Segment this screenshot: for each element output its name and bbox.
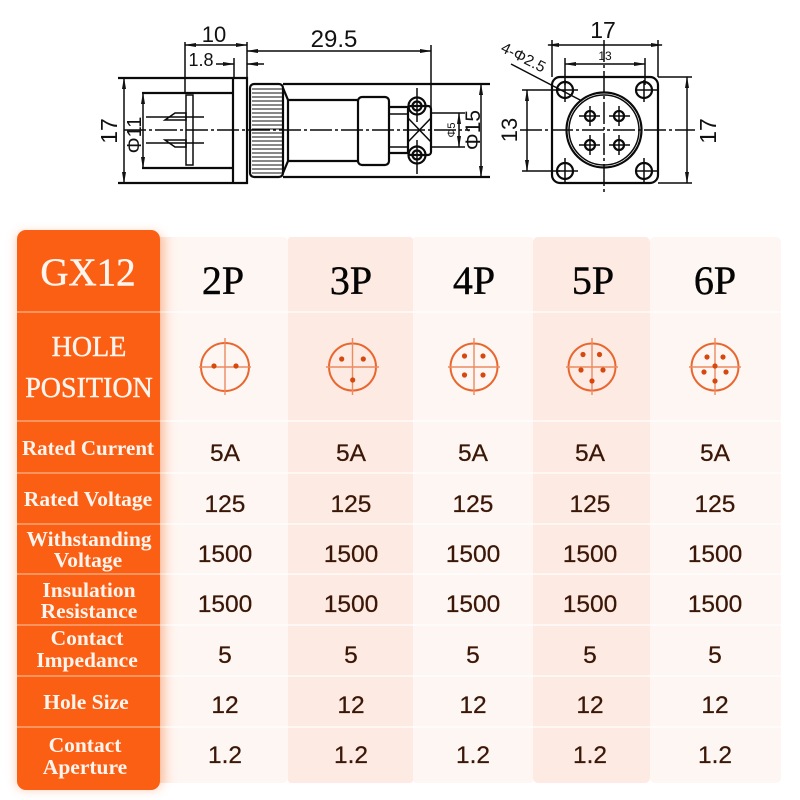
- dimension 29.5: 29.5: [311, 26, 357, 53]
- dimension 10: 10: [202, 22, 226, 47]
- cable clamp with screws: [408, 88, 431, 174]
- values: 4P column: 1500: [446, 591, 500, 618]
- values: 3P column: [324, 440, 378, 769]
- dimension phi 5: Φ5: [446, 123, 458, 137]
- values: 6P column: 1.2: [698, 742, 732, 769]
- values: 2P column: 5: [218, 642, 232, 669]
- sidebar shadow: [16, 232, 162, 790]
- column headings: 3P: [330, 258, 372, 303]
- dimension 17 top: 17: [590, 17, 616, 43]
- specification table: [16, 230, 781, 790]
- column headings: 6P: [694, 258, 736, 303]
- values: 3P column: 12: [337, 692, 365, 719]
- values: 3P column: 5: [344, 642, 358, 669]
- values: 3P column: 1500: [324, 591, 378, 618]
- dimension 17 top: [548, 17, 662, 77]
- values: 5P column: 5: [583, 642, 597, 669]
- values: 6P column: 1500: [688, 591, 742, 618]
- row labels: Insulation: [42, 578, 136, 602]
- row labels: Contact: [51, 626, 124, 650]
- dimension 17 height: [96, 78, 124, 183]
- label hole position: HOLE: [52, 332, 126, 363]
- side view technical drawing: [96, 22, 490, 183]
- dimension 17 height: 17: [96, 118, 122, 144]
- row labels: Contact: [49, 733, 122, 757]
- values: 4P column: 1500: [446, 541, 500, 568]
- central socket: [566, 92, 642, 168]
- icon: 2P hole position: [199, 338, 251, 395]
- column headings: [202, 258, 736, 303]
- dimension 17 right: [658, 77, 721, 183]
- values: 3P column: 5A: [336, 440, 367, 467]
- column headings: 2P: [202, 258, 244, 303]
- values: 4P column: 1.2: [456, 742, 490, 769]
- values: 4P column: 125: [453, 491, 493, 518]
- values: 6P column: 12: [701, 692, 729, 719]
- values: 3P column: 125: [331, 491, 371, 518]
- dimension 13 left: 13: [497, 118, 522, 142]
- dimension phi 15: [462, 84, 485, 177]
- row labels: Resistance: [41, 599, 137, 623]
- dimension phi 11: Φ11: [124, 117, 146, 153]
- row labels: Rated Current: [22, 436, 154, 460]
- dimension 10: [185, 22, 247, 93]
- values: 2P column: 5A: [210, 440, 241, 467]
- values: 2P column: [198, 440, 252, 769]
- column headings: 4P: [453, 258, 495, 303]
- column headings: 5P: [572, 258, 614, 303]
- values: 2P column: 1500: [198, 541, 252, 568]
- row labels: Hole Size: [43, 690, 129, 714]
- values: 6P column: 5: [708, 642, 722, 669]
- orange label sidebar: [17, 230, 160, 790]
- dimension phi 15: Φ15: [462, 110, 485, 150]
- centre lines: [520, 40, 695, 192]
- dimension phi 5: [431, 113, 465, 147]
- values: 2P column: 1500: [198, 591, 252, 618]
- values: 4P column: 5A: [458, 440, 489, 467]
- hole callout 4-phi 2.5: [498, 40, 582, 101]
- dimension 1.8: [188, 50, 264, 78]
- dimension 13 top: 13: [598, 49, 612, 63]
- values: 6P column: 1500: [688, 541, 742, 568]
- values: 6P column: 5A: [700, 440, 731, 467]
- sidebar title GX12: GX12: [40, 251, 136, 294]
- values: 6P column: 125: [695, 491, 735, 518]
- row separators: [17, 312, 781, 727]
- values: 5P column: [563, 440, 617, 769]
- dimension phi 11: [124, 93, 146, 168]
- dimension 13 top: [565, 49, 645, 85]
- values: 2P column: 12: [211, 692, 239, 719]
- front view technical drawing: [497, 17, 721, 192]
- values: 5P column: 1500: [563, 591, 617, 618]
- column backgrounds: [160, 237, 781, 783]
- knurled connector nut: [250, 84, 283, 177]
- flange and rear body: [118, 78, 247, 183]
- values: 5P column: 1500: [563, 541, 617, 568]
- row labels: Aperture: [43, 755, 127, 779]
- row labels: Rated Voltage: [24, 487, 152, 511]
- dimension 13 left: [497, 90, 560, 171]
- centre line: [124, 129, 470, 131]
- row labels: Withstanding: [26, 527, 152, 551]
- hole callout 4-phi 2.5: 4-Φ2.5: [498, 40, 548, 76]
- row labels: [22, 436, 154, 779]
- icon: 6P hole position: [689, 338, 741, 395]
- values: 6P column: [688, 440, 742, 769]
- dimension 17 right: 17: [695, 118, 721, 144]
- values: 4P column: 12: [459, 692, 487, 719]
- values: 5P column: 1.2: [573, 742, 607, 769]
- values: 4P column: 5: [466, 642, 480, 669]
- values: 4P column: [446, 440, 500, 769]
- row labels: Impedance: [36, 648, 138, 672]
- connector barrel and collar: [283, 84, 490, 177]
- label hole position: POSITION: [25, 373, 153, 404]
- values: 3P column: 1.2: [334, 742, 368, 769]
- icon: 5P hole position: [566, 338, 618, 395]
- square flange: [552, 77, 658, 183]
- values: 5P column: 125: [570, 491, 610, 518]
- label hole position: [25, 332, 153, 404]
- icon: 3P hole position: [326, 338, 379, 395]
- values: 2P column: 125: [205, 491, 245, 518]
- mounting holes: [556, 80, 657, 182]
- icon: 4P hole position: [448, 338, 500, 395]
- values: 5P column: 12: [576, 692, 604, 719]
- values: 5P column: 5A: [575, 440, 606, 467]
- dimension 1.8: 1.8: [188, 50, 214, 70]
- values: 2P column: 1.2: [208, 742, 242, 769]
- values: 3P column: 1500: [324, 541, 378, 568]
- row labels: Voltage: [54, 548, 122, 572]
